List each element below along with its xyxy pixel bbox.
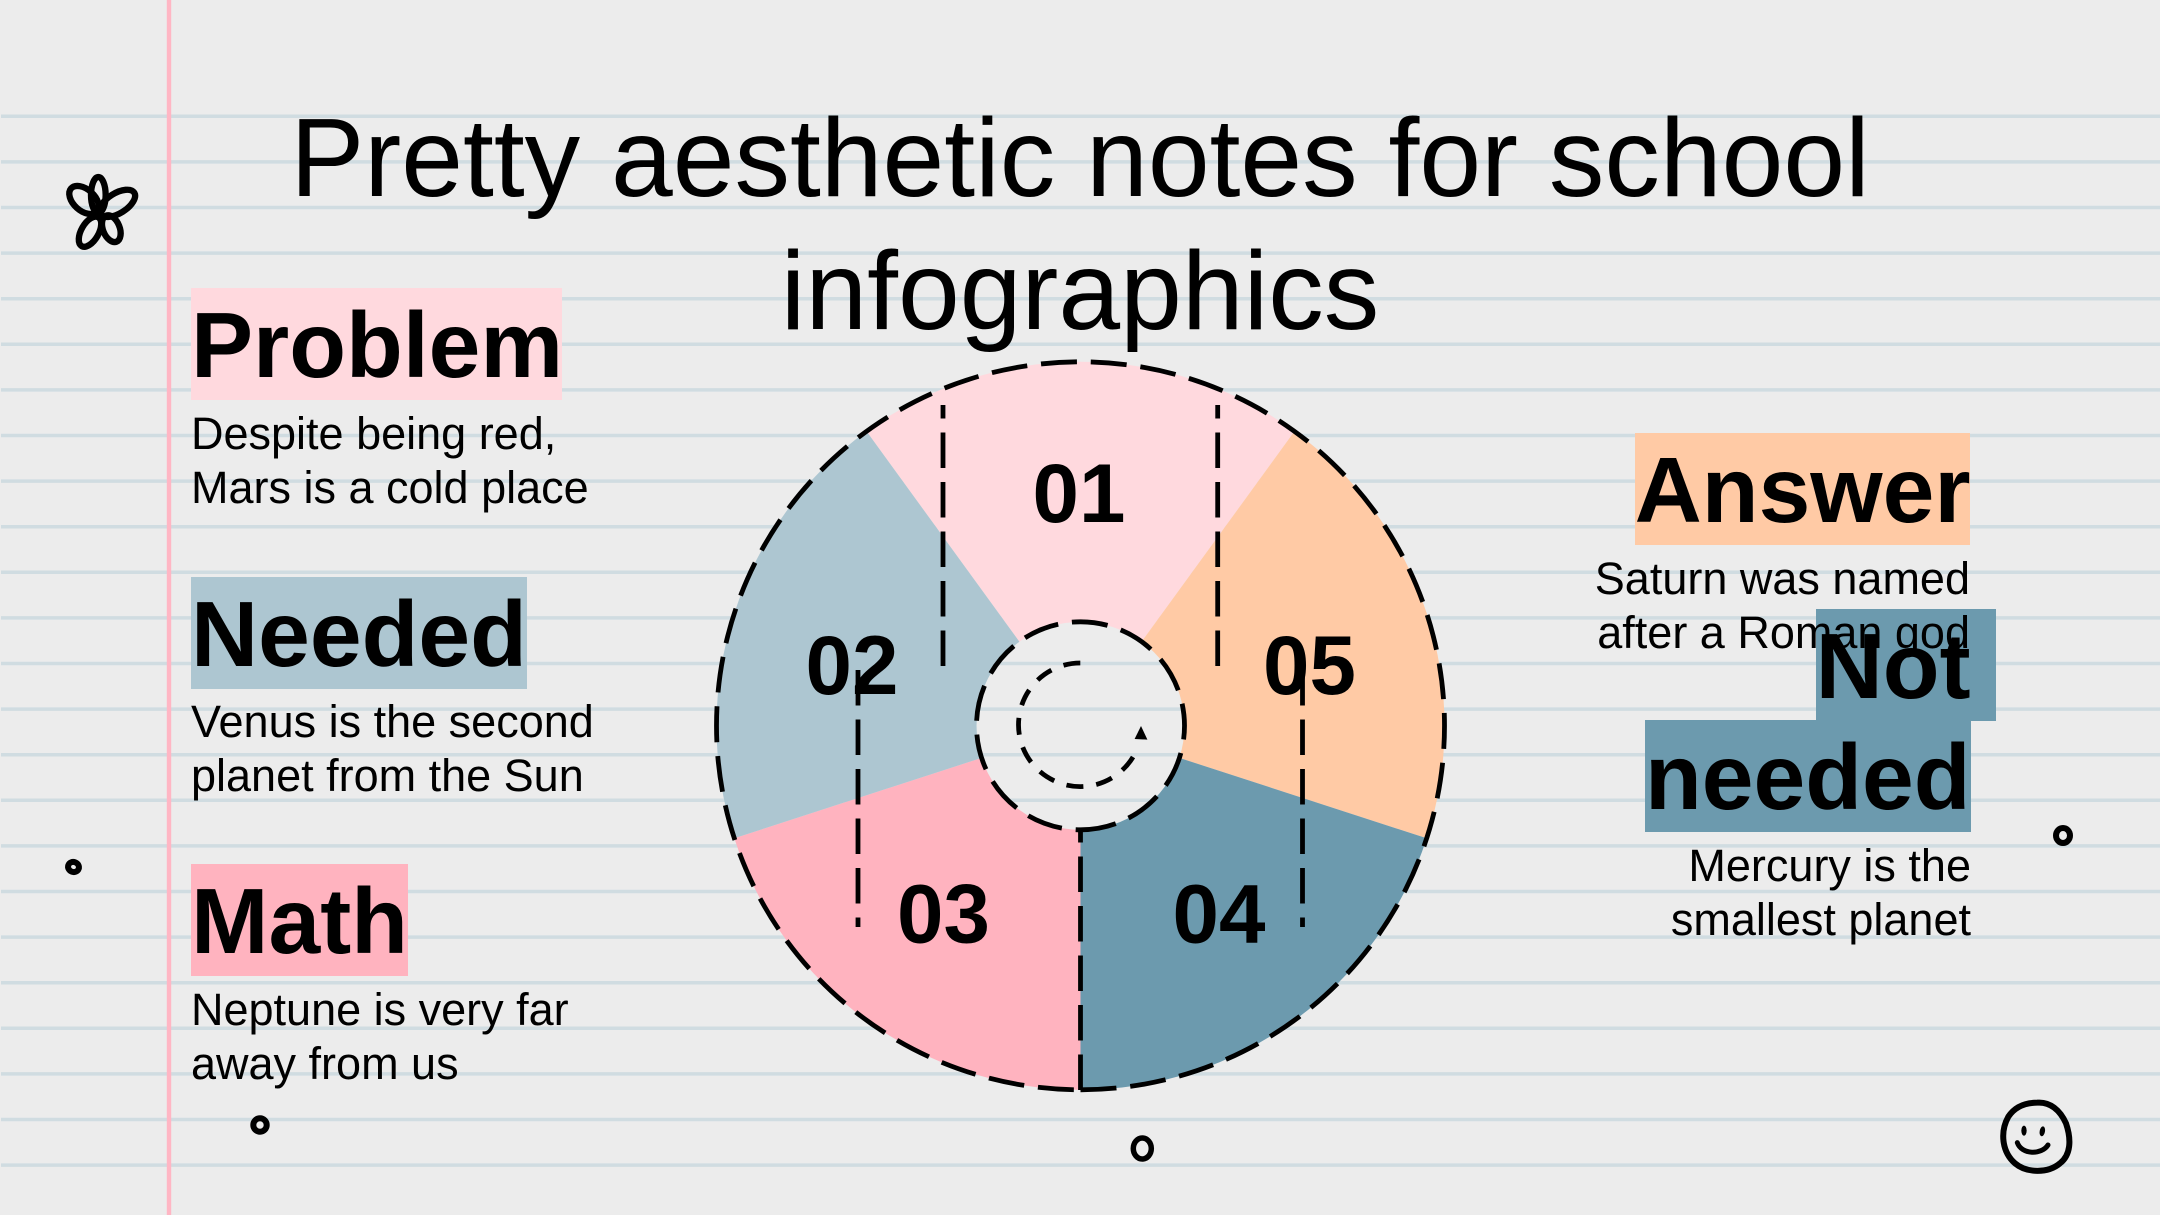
icon: small circle doodle right	[2056, 828, 2070, 843]
segment numbers	[806, 446, 1356, 960]
segment 02	[716, 431, 1019, 838]
panel: Problem	[191, 288, 589, 513]
segment 01	[866, 362, 1294, 642]
icon: flower	[64, 177, 140, 250]
segment 04	[1080, 758, 1427, 1090]
panel: Not needed	[1645, 609, 1996, 945]
segment numbers: 05	[1263, 618, 1356, 712]
text: Answer: Saturn was named	[1595, 553, 1970, 604]
heading: Not needed: needed	[1645, 725, 1971, 829]
text: Needed	[191, 696, 594, 801]
segment 05	[1142, 431, 1445, 838]
text: Needed: planet from the Sun	[191, 750, 584, 801]
heading: Needed: Needed	[191, 582, 527, 686]
segment numbers: 02	[806, 618, 898, 712]
segment numbers: 01	[1033, 446, 1125, 540]
text: Problem	[191, 408, 589, 513]
heading: Not needed: Not	[1816, 614, 1971, 718]
text: Not needed: Mercury is the	[1688, 840, 1971, 891]
panel: Math	[191, 864, 569, 1089]
icon: small circle doodle left	[67, 860, 80, 874]
title	[290, 96, 1870, 353]
panel: Answer	[1595, 433, 1971, 658]
heading: Not needed	[1645, 609, 1996, 832]
dashed outlines	[716, 362, 1444, 1090]
text: Problem: Mars is a cold place	[191, 462, 589, 513]
text: Needed: Venus is the second	[191, 696, 594, 747]
text: Math: away from us	[191, 1038, 459, 1089]
text: Answer: after a Roman god	[1597, 607, 1970, 658]
heading: Answer: Answer	[1635, 438, 1971, 542]
text: Problem: Despite being red,	[191, 408, 556, 459]
text: Math: Neptune is very far	[191, 984, 569, 1035]
icon: small circle doodle bottom left	[253, 1118, 267, 1132]
heading: Problem: Problem	[191, 293, 563, 397]
icon: small circle doodle bottom center	[1133, 1138, 1151, 1159]
icon: smiley face	[2003, 1103, 2069, 1171]
panel: Needed	[191, 577, 594, 801]
text: Not needed	[1671, 840, 1971, 945]
title: infographics	[781, 229, 1379, 353]
dashed vertical dividers	[858, 405, 1302, 1090]
arrow: circular dashed	[1019, 663, 1147, 787]
text: Math	[191, 984, 569, 1089]
segment numbers: 03	[897, 866, 990, 960]
text: Answer	[1595, 553, 1970, 658]
title: Pretty aesthetic notes for school	[290, 96, 1870, 220]
text: Not needed: smallest planet	[1671, 894, 1971, 945]
segment 03	[734, 758, 1080, 1090]
segment numbers: 04	[1173, 866, 1265, 960]
heading: Math: Math	[191, 869, 408, 973]
